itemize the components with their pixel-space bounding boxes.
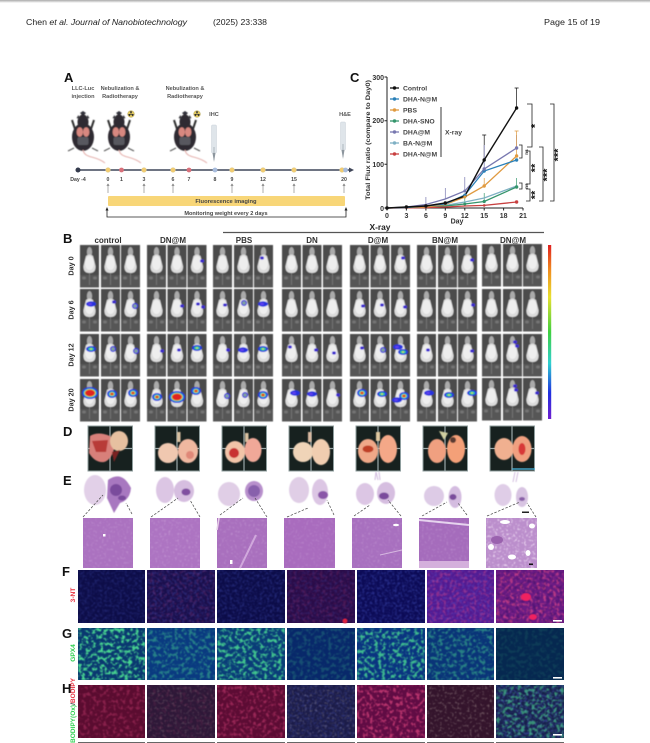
tile H5 [357, 685, 425, 738]
weight monitoring bracket [106, 207, 348, 217]
magnified section: DN@M [150, 518, 200, 568]
axis tick labels: 0 [385, 213, 389, 220]
panel letter C: C [350, 70, 360, 85]
significance marks: ** [530, 190, 542, 199]
icon: radiation day 1 [128, 111, 134, 117]
legend: PBS [403, 108, 417, 114]
row headings: Day 0 [66, 256, 76, 276]
day labels: 0 [107, 177, 110, 183]
tile H4 [287, 685, 355, 738]
axis tick labels: 100 [372, 162, 384, 169]
panel letter B: B [63, 231, 72, 246]
significance marks: ns [524, 149, 529, 155]
tile H7 with scale bar [496, 685, 564, 738]
day labels: 20 [341, 177, 347, 183]
tile F2 [147, 570, 215, 623]
panel G: GPX4 staining [62, 626, 564, 680]
tile H6 [427, 685, 494, 738]
lung photo: DN@M [155, 426, 200, 471]
tile H3 [217, 685, 285, 738]
panel B: bioluminescence imaging [63, 222, 551, 422]
panel A: treatment timeline [64, 70, 354, 217]
icon: mouse injection [68, 111, 105, 163]
significance marks: *** [552, 148, 564, 161]
column headings: D@M [368, 236, 388, 245]
lung photo: control [88, 426, 132, 471]
magnified section: PBS [217, 518, 267, 568]
panel H: BODIPY staining [62, 677, 564, 743]
legend [390, 86, 462, 158]
icon: mouse nebulization day 7 [170, 111, 207, 163]
tile H2 [147, 685, 215, 738]
significance marks: * [530, 123, 542, 128]
significance marks: ** [530, 163, 542, 172]
tile F7 with scale bar [496, 570, 564, 623]
icon: mouse nebulization day 1 [104, 111, 141, 163]
day labels: 3 [143, 177, 146, 183]
legend: X-ray [445, 130, 462, 136]
tile F5 [357, 570, 425, 623]
column headings [94, 236, 526, 245]
day labels: 7 [188, 177, 191, 183]
error bars [426, 88, 519, 204]
column headings: control [94, 236, 122, 245]
step labels: Nebulization & [101, 86, 139, 92]
column headings: DN@M [160, 236, 186, 245]
axis tick labels: 0 [380, 206, 384, 213]
panel D: excised lung photos [63, 424, 535, 471]
day labels: 1 [120, 177, 123, 183]
lung photo: DN [289, 426, 334, 471]
series: DHA-N@M blue [387, 160, 517, 208]
mouse images: DN@M [147, 245, 206, 422]
imaging arrows [107, 184, 345, 193]
axis tick labels [372, 75, 527, 226]
axes [384, 77, 523, 210]
series: DHA@M [387, 148, 517, 208]
panel F: 3-NT staining [62, 564, 564, 624]
magnified section: BN@M [419, 518, 469, 568]
row label BODIPY(Ox)/BODIPY: BODIPY(Ox)/BODIPY [70, 677, 77, 743]
page header [26, 17, 600, 27]
axis tick labels: 300 [372, 75, 384, 82]
legend: DHA-SNO [403, 118, 435, 126]
series: BA-N@M [387, 186, 517, 208]
panel letter E: E [63, 473, 72, 488]
step labels: injection [72, 94, 95, 100]
row headings: Day 12 [66, 343, 76, 367]
tile G5 [357, 628, 425, 680]
significance marks: *** [542, 168, 554, 181]
lung photo: DN@M irradiated with scale bar [490, 426, 535, 471]
page header: (2025) 23:338 [213, 17, 267, 27]
axis tick labels: Day [451, 218, 464, 226]
tile F1 [78, 570, 145, 623]
step labels: Radiotherapy [167, 94, 204, 100]
mouse images: D@M [350, 245, 410, 422]
mouse images: DN [282, 245, 342, 422]
legend: DHA-N@M [403, 96, 438, 104]
lung photo: BN@M [423, 426, 468, 471]
scale bar for whole section [522, 512, 529, 513]
series: DHA-N@M red [387, 202, 517, 208]
column headings: DN [306, 236, 318, 245]
magnified section: D@M [352, 518, 402, 568]
day labels: 15 [291, 177, 297, 183]
day labels: 12 [260, 177, 266, 183]
significance brackets [519, 104, 554, 201]
tile G7 with scale bar [496, 628, 564, 680]
series: Control [387, 108, 517, 208]
step labels: H&E [339, 112, 351, 118]
icon: radiation day 7 [194, 111, 200, 117]
panel letter D: D [63, 424, 72, 439]
tile G1 [78, 628, 145, 680]
step labels: Nebulization & [166, 86, 204, 92]
panel E: H&E sections [63, 472, 537, 568]
tile F4 [287, 570, 355, 624]
icon: tube H&E [340, 122, 346, 159]
day labels: 8 [214, 177, 217, 183]
row headings [66, 256, 76, 412]
legend: DHA@M [403, 130, 430, 136]
row label GPX4: GPX4 [70, 644, 77, 662]
lung photo: PBS [222, 426, 266, 471]
column headings: PBS [236, 236, 253, 245]
tile G6 [427, 628, 494, 680]
page header: Page 15 of 19 [544, 17, 600, 27]
panel letter F: F [62, 564, 70, 579]
tile F3 [217, 570, 285, 623]
color scale bar [548, 245, 551, 419]
zoom guide dashed lines [83, 495, 536, 517]
tile H1 [78, 685, 145, 738]
legend: Control [403, 86, 427, 92]
significance marks: ns [524, 183, 529, 189]
icon: tube IHC [212, 125, 216, 162]
legend: BA-N@M [403, 140, 433, 148]
step labels [72, 86, 351, 118]
significance marks [524, 123, 564, 199]
weight monitoring bracket: Monitoring weight every 2 days [184, 211, 268, 217]
step labels: LLC-Luc [72, 86, 94, 92]
mouse images: DN@M irradiated [482, 244, 542, 420]
page header: Chen et al. Journal of Nanobiotechnology [26, 17, 188, 27]
tile G2 [147, 628, 215, 680]
step labels: Radiotherapy [102, 94, 139, 100]
axis tick labels: 3 [404, 213, 408, 220]
X-ray heading and rule: X-ray [370, 222, 391, 232]
panel letter G: G [62, 626, 72, 641]
column headings: BN@M [432, 236, 458, 245]
mouse images: PBS [213, 245, 273, 422]
mouse images: control [80, 245, 140, 422]
axis tick labels: 21 [519, 213, 527, 220]
axis tick labels: 12 [461, 213, 469, 220]
magnified section: DN@M irradiated [486, 518, 537, 568]
day labels [70, 177, 347, 183]
tile G3 [217, 628, 285, 680]
tile F6 [427, 570, 494, 623]
fluorescence imaging bar [108, 196, 345, 206]
column headings: DN@M [500, 236, 526, 245]
whole lung sections [84, 472, 528, 513]
day labels: Day -4 [70, 177, 86, 183]
magnified section: control [83, 518, 133, 568]
next row strip cut off at page bottom [78, 742, 564, 743]
axis tick labels: 18 [500, 213, 508, 220]
fluorescence imaging bar: Fluorescence imaging [195, 199, 257, 205]
row headings: Day 20 [66, 388, 76, 412]
magnified section: DN [284, 518, 335, 568]
tile G4 [287, 628, 355, 680]
data point markers [385, 106, 518, 210]
step labels: IHC [209, 112, 219, 118]
panel letter H: H [62, 681, 71, 696]
axis tick labels: 9 [443, 213, 447, 220]
row headings: Day 6 [66, 300, 76, 320]
axis tick labels: 200 [372, 118, 384, 125]
axis tick labels: 6 [424, 213, 428, 220]
axis tick labels: 15 [480, 213, 488, 220]
day labels: 6 [172, 177, 175, 183]
series: PBS [387, 156, 517, 208]
series: DHA-SNO [387, 187, 517, 208]
row label 3-NT: 3-NT [70, 588, 77, 602]
y axis title: Total Flux ratio (compare to Day0) [365, 80, 372, 200]
legend: DHA-N@M [403, 152, 438, 158]
lung photo: D@M [356, 426, 400, 471]
day labels: 9 [231, 177, 234, 183]
timeline axis with day markers [76, 168, 354, 172]
panel letter A: A [64, 70, 74, 85]
panel C: total flux line chart [350, 70, 564, 226]
mouse images: BN@M [417, 245, 477, 422]
